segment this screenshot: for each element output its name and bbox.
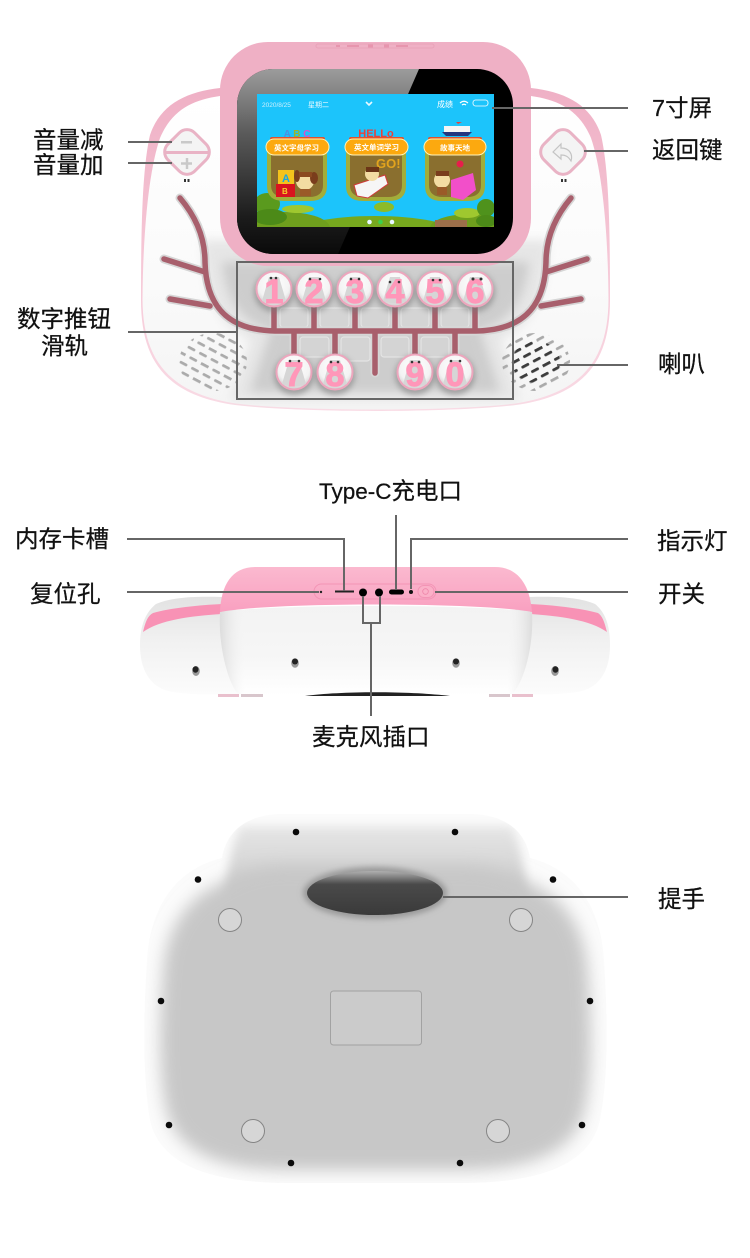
card: english letters: 英文字母学习 xyxy=(274,142,319,152)
callout: back key xyxy=(584,137,722,163)
callout: volume up xyxy=(33,152,172,178)
recess outer xyxy=(203,240,548,400)
callout: speaker: 喇叭 xyxy=(658,351,705,377)
rubber feet xyxy=(218,694,533,697)
callouts: front view xyxy=(17,95,722,399)
handle recess xyxy=(303,867,447,919)
power button xyxy=(418,586,434,598)
number sliders: 6 xyxy=(466,273,484,311)
card: english words: GO! xyxy=(376,156,401,171)
callout: back key: 返回键 xyxy=(652,137,722,163)
device body xyxy=(141,88,610,411)
callout: number slider track: 数字推钮 xyxy=(17,306,111,332)
indicator dots xyxy=(184,179,566,182)
pink top housing xyxy=(220,567,532,612)
rear view of device xyxy=(144,814,607,1183)
number sliders: 5 xyxy=(426,273,444,311)
mic jacks xyxy=(359,588,383,596)
slider tracks xyxy=(164,198,587,373)
front view of device xyxy=(141,42,610,411)
number sliders: 3 xyxy=(346,273,364,311)
callout: number slider track xyxy=(17,306,237,359)
card: english letters: B xyxy=(282,187,288,196)
card: english letters: A B C xyxy=(284,129,310,140)
recess shading xyxy=(222,262,529,392)
bottom-edge view of device xyxy=(140,567,610,697)
rear housing xyxy=(144,814,607,1183)
number sliders: 8 xyxy=(326,356,344,394)
callouts: bottom edge view xyxy=(15,478,728,750)
card: english words: HELLo xyxy=(358,128,394,140)
left pink band xyxy=(143,604,222,632)
card: story land: 故事天地 xyxy=(440,142,470,152)
volume button xyxy=(160,125,214,179)
callout: number slider track: 滑轨 xyxy=(41,333,88,359)
number slider frame xyxy=(237,262,513,399)
right pink band xyxy=(530,604,607,632)
rubber pads xyxy=(218,908,532,1142)
card: english letters: A xyxy=(282,173,290,185)
status bar: 成绩 xyxy=(437,99,453,109)
screw holes xyxy=(158,829,593,1166)
status bar xyxy=(262,99,488,109)
indicator light xyxy=(409,590,413,594)
centre housing edge shading xyxy=(220,606,532,696)
callout: memory card slot: 内存卡槽 xyxy=(15,526,109,552)
left wing xyxy=(140,597,240,695)
callout: indicator light xyxy=(411,528,728,589)
callout: microphone jack xyxy=(312,596,430,750)
callout: 7 inch screen: 7寸屏 xyxy=(652,95,712,121)
status bar: 星期二 xyxy=(308,101,329,109)
memory card slot xyxy=(335,590,354,592)
number sliders: 7 xyxy=(285,356,303,394)
port capsule xyxy=(314,584,436,599)
black glass xyxy=(237,69,513,254)
callout: volume down: 音量减 xyxy=(33,127,104,153)
callout: indicator light: 指示灯 xyxy=(657,528,728,554)
number sliders: 4 xyxy=(386,273,405,311)
reset hole xyxy=(320,591,322,593)
rear shading xyxy=(160,826,591,1170)
body white face xyxy=(142,96,608,410)
bezel top controls xyxy=(316,44,434,48)
card: english words: 英文单词学习 xyxy=(354,142,399,152)
callout: reset hole: 复位孔 xyxy=(30,581,100,607)
centre white housing xyxy=(220,606,532,696)
glass reflection xyxy=(237,69,419,254)
right wing xyxy=(510,597,610,695)
hills xyxy=(257,193,494,227)
callout: volume down xyxy=(33,127,172,153)
screen xyxy=(257,94,494,227)
number sliders: 1 xyxy=(265,273,283,311)
right speaker xyxy=(502,333,570,391)
callout: memory card slot xyxy=(15,526,344,591)
card: english words xyxy=(345,128,408,201)
callout: type-c port: Type-C充电口 xyxy=(319,478,462,504)
number sliders: 2 xyxy=(305,273,323,311)
callout: volume up: 音量加 xyxy=(33,152,104,178)
callout: power switch: 开关 xyxy=(658,581,705,607)
left speaker xyxy=(179,333,247,391)
screw holes xyxy=(192,658,559,676)
base shadow xyxy=(305,692,450,696)
status bar: 2020/8/25 xyxy=(262,102,291,109)
number sliders: 9 xyxy=(406,356,424,394)
number sliders xyxy=(254,272,495,395)
callout: handle: 提手 xyxy=(658,886,705,912)
card: story land xyxy=(424,122,486,201)
track cell panels xyxy=(280,308,469,361)
callout: microphone jack: 麦克风插口 xyxy=(312,724,430,750)
back button xyxy=(536,125,590,179)
number sliders: 0 xyxy=(446,356,464,394)
card: english letters xyxy=(266,129,329,201)
screen bezel xyxy=(220,42,531,266)
type-c port xyxy=(389,590,404,594)
label plate xyxy=(330,991,422,1045)
